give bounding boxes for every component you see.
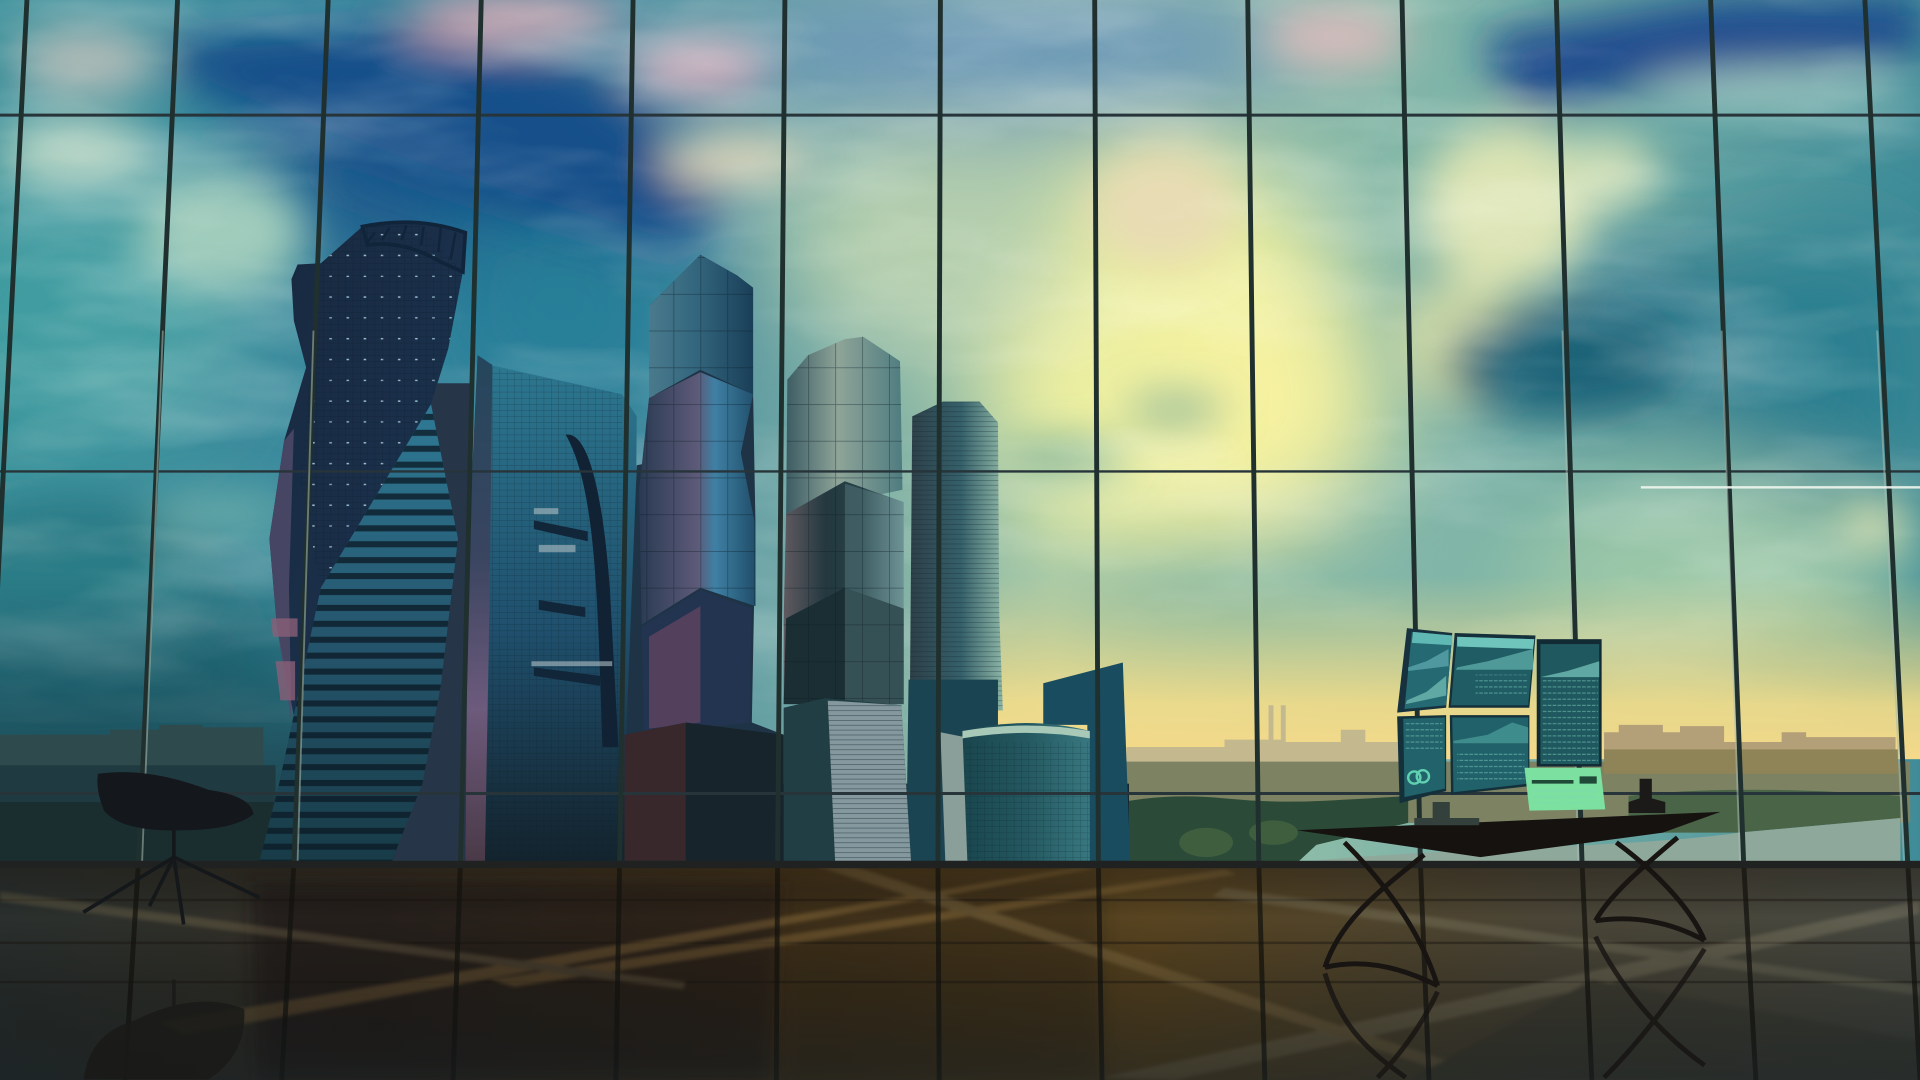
screen: top left	[1397, 628, 1452, 713]
screen: bottom middle	[1450, 715, 1529, 795]
light beams on floor	[0, 863, 1920, 1080]
tall stacked tower	[624, 255, 784, 861]
desk reflection	[1325, 937, 1704, 1078]
screen: top middle	[1449, 633, 1536, 708]
light streak on glass	[1641, 486, 1920, 489]
monitor stand	[1414, 802, 1479, 825]
curved glass tower	[465, 355, 637, 861]
chair reflection	[86, 980, 243, 1078]
mullion side highlights	[142, 331, 1904, 863]
evolution twisted tower	[260, 222, 465, 861]
floor with reflections	[0, 863, 1920, 1080]
dark base behind towers	[382, 784, 1129, 862]
tower behind evolution	[392, 383, 470, 862]
chair	[83, 772, 260, 924]
distant city and river	[0, 705, 1910, 863]
desk with legs	[1297, 812, 1720, 986]
cylindrical tower	[910, 402, 1003, 710]
window sill	[0, 861, 1920, 868]
second stacked tower	[784, 337, 904, 704]
laptop	[1524, 768, 1605, 811]
horizontal transoms	[0, 115, 1920, 793]
mullion reflections	[125, 863, 1920, 1080]
vertical mullions	[0, 0, 1908, 863]
monitors	[1397, 628, 1665, 825]
desk object	[1629, 779, 1665, 813]
screen: right tall	[1537, 639, 1602, 767]
low-rise buildings	[784, 662, 1130, 861]
screen: bottom left	[1397, 715, 1446, 803]
skyline towers	[260, 222, 1130, 862]
